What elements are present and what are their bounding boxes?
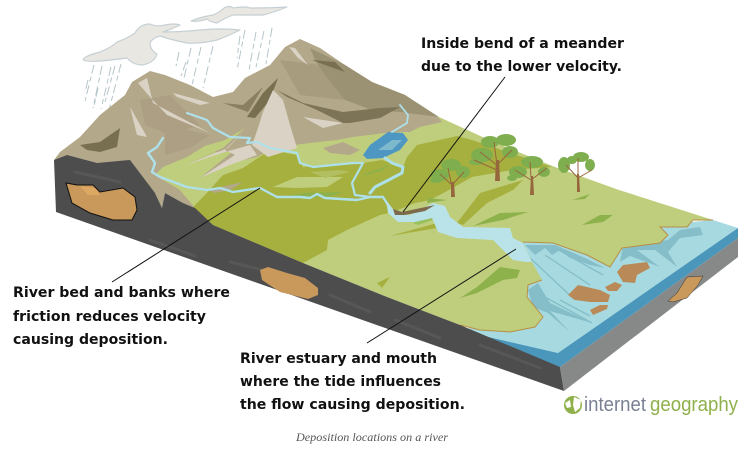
sand bars bbox=[568, 262, 650, 315]
callout: river bed: causing deposition. bbox=[13, 332, 168, 348]
callout: estuary: where the tide influences bbox=[240, 374, 441, 390]
dark upper slope bbox=[310, 48, 439, 117]
river tributaries bbox=[148, 105, 408, 213]
mountains bbox=[54, 39, 442, 208]
sea shadows bbox=[525, 227, 703, 332]
dark rock patches bbox=[80, 128, 120, 152]
logo: geography bbox=[650, 394, 738, 416]
sediment body middle bbox=[260, 267, 318, 299]
callout: inside bend: Inside bend of a meander bbox=[421, 36, 624, 52]
icon: globe bbox=[564, 396, 582, 414]
callout: river bed bbox=[13, 285, 230, 348]
trees bbox=[430, 134, 595, 197]
rain bbox=[85, 28, 272, 110]
leader line: meander bbox=[403, 77, 505, 212]
callout: estuary: the flow causing deposition. bbox=[240, 397, 465, 413]
leader line: estuary bbox=[367, 249, 516, 343]
lake bbox=[363, 132, 408, 159]
coast sand edge bbox=[460, 220, 713, 332]
side face: dark rock bbox=[54, 155, 564, 391]
green streaks bbox=[277, 165, 613, 298]
logo: internet bbox=[584, 394, 646, 416]
land bbox=[130, 110, 713, 332]
rock streaks bbox=[75, 172, 540, 368]
meander deposit bbox=[393, 205, 435, 215]
callout: inside bend bbox=[421, 36, 624, 75]
side face: gray right bbox=[560, 238, 738, 391]
callout: estuary: River estuary and mouth bbox=[240, 351, 437, 367]
mid tone shading bbox=[140, 95, 200, 135]
olive flood plain bbox=[193, 136, 613, 298]
sea bbox=[467, 220, 738, 353]
rain clouds bbox=[83, 6, 287, 65]
logo bbox=[564, 394, 738, 416]
sea edge strip bbox=[467, 228, 738, 367]
pale cliff faces bbox=[252, 90, 297, 157]
callout: river bed: River bed and banks where bbox=[13, 285, 230, 301]
leader line: river bed bbox=[112, 188, 260, 282]
callout: estuary bbox=[240, 351, 465, 413]
sediment body right bbox=[668, 276, 703, 302]
sediment body left bbox=[66, 183, 137, 220]
pale strips bbox=[273, 177, 343, 188]
estuary bbox=[386, 200, 532, 262]
caption: Deposition locations on a river bbox=[295, 432, 449, 444]
callout: inside bend: due to the lower velocity. bbox=[421, 59, 622, 75]
callout: river bed: friction reduces velocity bbox=[13, 309, 206, 325]
tan patch in grass bbox=[323, 142, 360, 155]
